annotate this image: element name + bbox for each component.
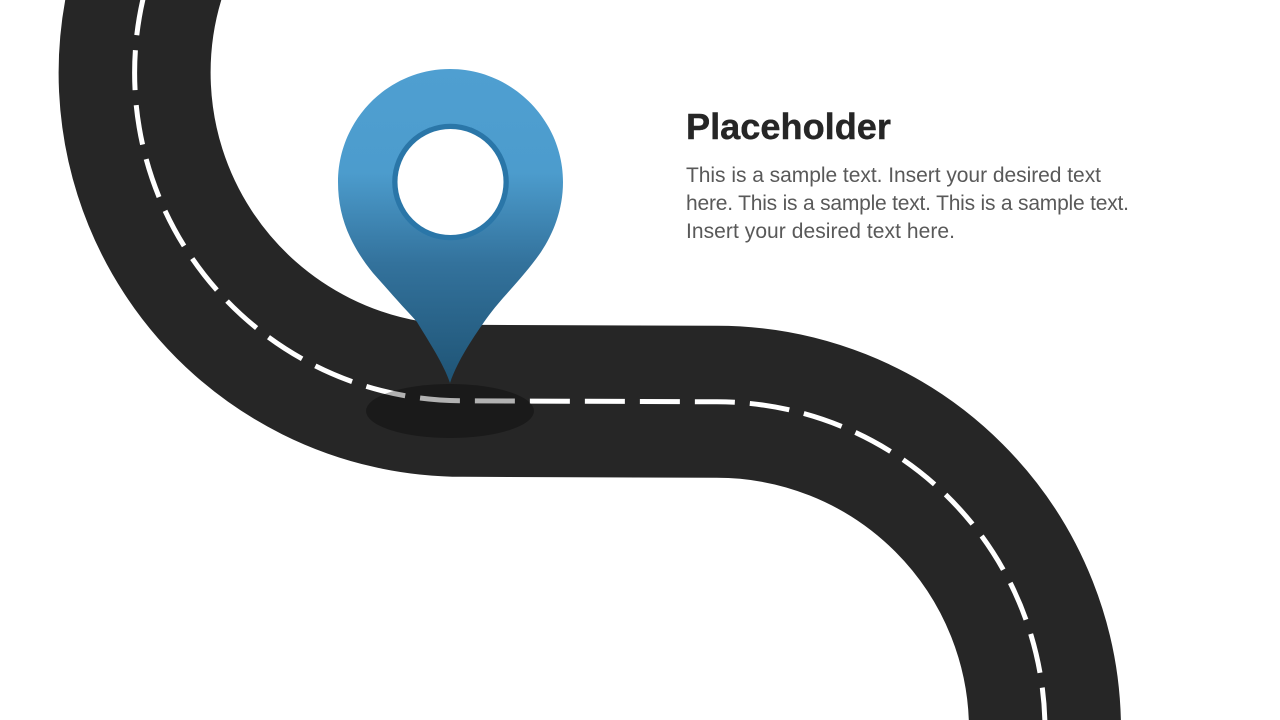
body text: This is a sample text. Insert your desired text	[686, 164, 1101, 187]
heading: Placeholder	[686, 106, 891, 147]
road surface	[135, 0, 1045, 720]
pin body	[338, 69, 563, 383]
icon: location pin	[338, 69, 563, 383]
body text	[686, 164, 1129, 243]
road	[135, 0, 1045, 720]
pin shadow	[366, 384, 534, 438]
body text: here. This is a sample text. This is a sample text.	[686, 192, 1129, 215]
pin hole	[398, 129, 504, 235]
body text: Insert your desired text here.	[686, 220, 955, 243]
road centre dashed line	[135, 0, 1045, 720]
pin ring	[392, 124, 509, 240]
